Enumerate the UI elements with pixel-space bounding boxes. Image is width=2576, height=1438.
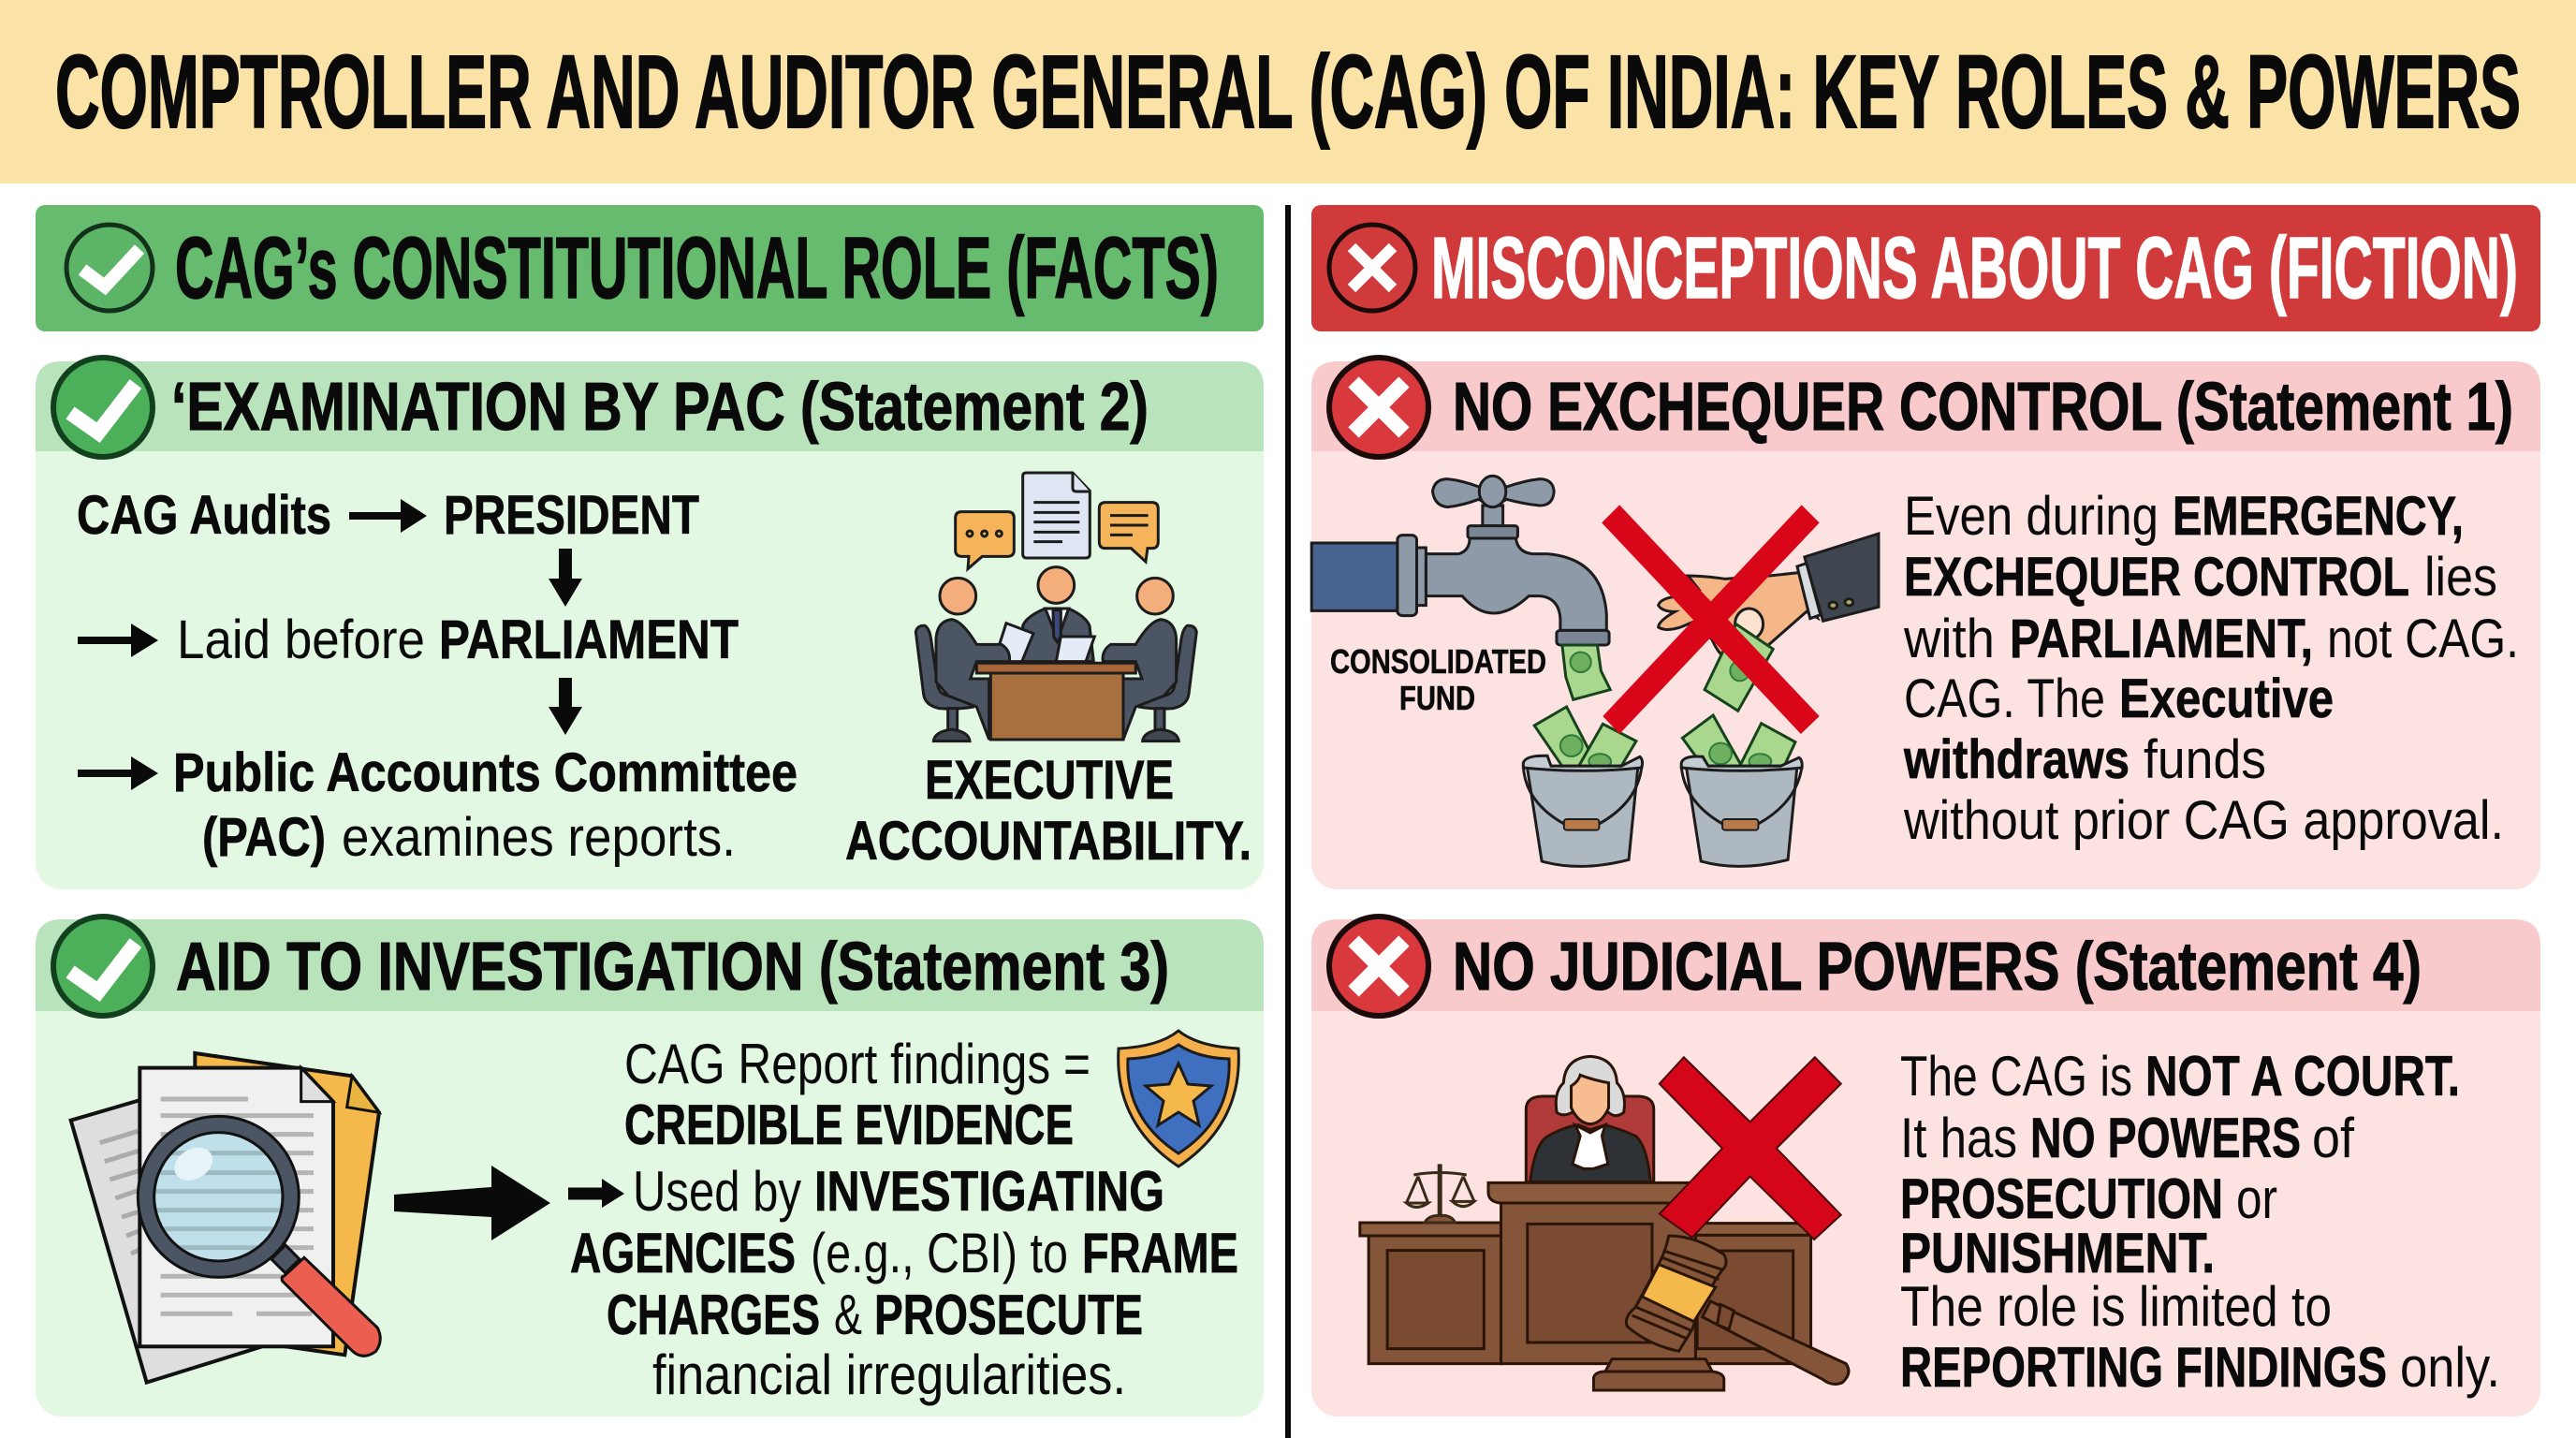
icon: hand taking money <box>1659 534 1879 711</box>
flow line: Public Accounts Committee: examines reports. <box>342 807 736 868</box>
text block: exchequer control: lies <box>2424 547 2497 608</box>
panel: no judicial powers <box>1311 917 2540 1416</box>
heading: fiction column <box>1311 205 2540 331</box>
text block: credible evidence: & <box>834 1284 862 1346</box>
icon: documents with magnifier <box>71 1053 380 1383</box>
text block: credible evidence: financial irregularities. <box>652 1343 1126 1406</box>
title banner <box>0 0 2576 183</box>
panel: examination by PAC <box>36 358 1264 889</box>
panel: no exchequer control <box>1311 358 2540 889</box>
text block: credible evidence: CREDIBLE EVIDENCE <box>624 1093 1074 1156</box>
text block: judicial powers: or <box>2236 1167 2277 1230</box>
text block: credible evidence: CHARGES <box>607 1284 820 1346</box>
text block: judicial powers: PROSECUTION <box>1900 1167 2223 1230</box>
caption: executive accountability <box>845 750 1251 872</box>
heading: facts column: CAG’s CONSTITUTIONAL ROLE (FACTS) <box>175 219 1219 316</box>
text block: credible evidence: AGENCIES <box>570 1222 796 1284</box>
icon: red cross <box>1602 505 1820 734</box>
heading: facts column <box>36 205 1264 331</box>
flow line: laid before Parliament <box>78 609 739 670</box>
icon: gavel <box>1593 1236 1849 1390</box>
icon: judge at bench <box>1360 1056 1811 1364</box>
arrow: documents to evidence <box>394 1166 550 1240</box>
panel heading: examination by PAC: ‘EXAMINATION BY PAC (Statement 2) <box>171 370 1149 445</box>
center divider <box>1285 205 1291 1438</box>
text block: judicial powers: REPORTING FINDINGS <box>1900 1336 2387 1399</box>
flow line: laid before Parliament: Laid before <box>177 609 425 670</box>
flow line: Public Accounts Committee <box>78 742 798 868</box>
icon: cross badge <box>1329 358 1428 457</box>
icon: falling banknote <box>1562 645 1610 699</box>
icon: committee meeting <box>915 473 1196 741</box>
text block: exchequer control: EXCHEQUER CONTROL <box>1904 547 2409 608</box>
text block: exchequer control: without prior CAG approval. <box>1903 790 2504 851</box>
text block: credible evidence: (e.g., CBI) to <box>811 1222 1068 1284</box>
panel heading: aid to investigation: AID TO INVESTIGATION (Statement 3) <box>176 930 1169 1005</box>
icon: red cross <box>1660 1057 1841 1240</box>
icon: money bucket left <box>1523 707 1643 866</box>
flow line: Public Accounts Committee: (PAC) <box>202 807 326 868</box>
text block: judicial powers: of <box>2312 1107 2354 1169</box>
icon: check badge <box>53 917 153 1016</box>
flow line: CAG audits to President: CAG Audits <box>77 485 331 546</box>
text block: judicial powers: NO POWERS <box>2030 1107 2301 1169</box>
text block: exchequer control: with <box>1903 609 1995 669</box>
text block: judicial powers: The CAG is <box>1900 1045 2132 1108</box>
flow line: Public Accounts Committee: Public Accounts Committee <box>173 742 798 803</box>
icon: shield with star <box>1119 1031 1238 1167</box>
text block: judicial powers <box>1900 1045 2500 1399</box>
icon: money bucket right <box>1681 715 1802 866</box>
flow line: CAG audits to President: PRESIDENT <box>444 485 699 546</box>
text block: exchequer control: EMERGENCY, <box>2173 486 2464 547</box>
text block: judicial powers: PUNISHMENT. <box>1900 1222 2215 1284</box>
text block: credible evidence: Used by <box>633 1160 801 1223</box>
text block: judicial powers: NOT A COURT. <box>2145 1045 2460 1108</box>
text block: judicial powers: It has <box>1900 1107 2017 1169</box>
text block: judicial powers: The role is limited to <box>1900 1275 2332 1338</box>
label: consolidated fund: CONSOLIDATED <box>1330 642 1546 681</box>
icon: check badge <box>53 358 153 457</box>
label: consolidated fund <box>1330 642 1546 717</box>
text block: exchequer control: Executive <box>2119 668 2334 729</box>
text block: credible evidence <box>568 1033 1238 1406</box>
arrow: down to Parliament <box>549 549 582 607</box>
text block: exchequer control <box>1903 486 2519 851</box>
text block: credible evidence: FRAME <box>1082 1222 1238 1284</box>
panel: aid to investigation <box>36 917 1264 1416</box>
text block: exchequer control: Even during <box>1904 486 2159 547</box>
flow line: laid before Parliament: PARLIAMENT <box>439 609 739 670</box>
icon: scales of justice <box>1406 1164 1474 1223</box>
text block: credible evidence: INVESTIGATING <box>814 1160 1164 1223</box>
flow line: CAG audits to President <box>77 485 699 546</box>
text block: exchequer control: withdraws <box>1903 729 2130 790</box>
icon: cross badge <box>1329 917 1428 1016</box>
icon: faucet <box>1311 476 1609 645</box>
text block: exchequer control: not CAG. <box>2327 609 2519 669</box>
caption: executive accountability: ACCOUNTABILITY. <box>845 811 1251 872</box>
text block: credible evidence: PROSECUTE <box>874 1284 1143 1346</box>
caption: executive accountability: EXECUTIVE <box>925 750 1174 811</box>
text block: credible evidence: CAG Report findings = <box>624 1033 1090 1095</box>
text block: judicial powers: only. <box>2400 1336 2500 1399</box>
text block: exchequer control: CAG. The <box>1904 668 2105 729</box>
arrow: down to PAC <box>549 678 582 735</box>
text block: exchequer control: PARLIAMENT, <box>2010 609 2313 669</box>
label: consolidated fund: FUND <box>1399 679 1475 717</box>
text block: exchequer control: funds <box>2144 729 2266 790</box>
